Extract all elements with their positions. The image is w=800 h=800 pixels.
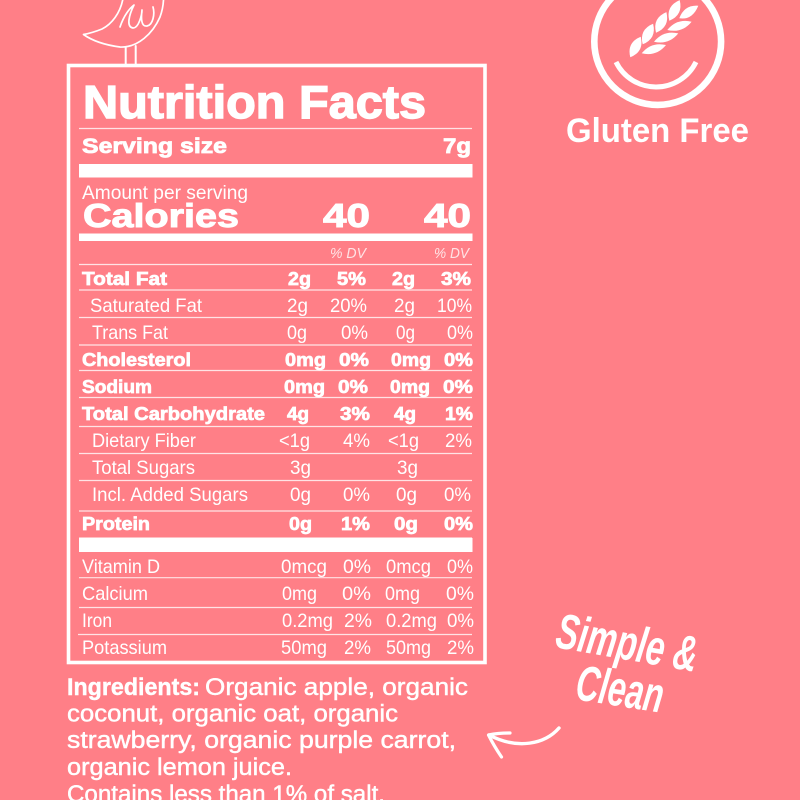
row: vitamin D [82, 556, 473, 578]
wheat ear [630, 0, 698, 57]
row: potassium [82, 637, 474, 659]
row: protein: 0% [444, 514, 473, 534]
row: total carbohydrate: 1% [445, 404, 473, 424]
row: cholesterol: Cholesterol [82, 350, 191, 370]
row: protein [82, 514, 473, 534]
row: cholesterol [82, 350, 473, 370]
serving size row [82, 135, 471, 158]
row: cholesterol: 0mg [391, 350, 431, 370]
divider lines [78, 128, 472, 634]
label border [68, 66, 485, 662]
row: cholesterol: 0mg [285, 350, 326, 370]
row: total carbohydrate: Total Carbohydrate [82, 404, 265, 424]
row: saturated fat: 20% [330, 295, 367, 317]
row: total fat [82, 269, 471, 289]
row: total sugars [92, 457, 418, 479]
row: added sugars: Incl. Added Sugars [92, 484, 248, 506]
percent daily value headers: % DV [434, 245, 471, 262]
row: saturated fat [90, 295, 472, 317]
row: potassium: 2% [447, 637, 474, 659]
row: dietary fiber: <1g [388, 430, 419, 452]
row: sodium: 0% [443, 377, 473, 397]
row: iron: 0% [447, 610, 474, 632]
row: calcium: 0% [342, 583, 371, 605]
row: potassium: 2% [344, 637, 371, 659]
icon: bird perched on label [84, 0, 164, 64]
row: cholesterol: 0% [444, 350, 473, 370]
row: iron [82, 610, 474, 632]
heading: gluten free: Gluten Free [566, 112, 749, 150]
callout: simple and clean: Simple & [552, 603, 703, 683]
row: saturated fat: 2g [394, 295, 415, 317]
row: sodium: 0% [338, 377, 368, 397]
row: dietary fiber: <1g [279, 430, 310, 452]
row: added sugars: 0% [343, 484, 370, 506]
row: sodium: Sodium [82, 377, 152, 397]
text block: ingredients: Organic apple, organic [205, 674, 468, 701]
text block: ingredients: Ingredients: [67, 674, 200, 701]
row: total sugars: 3g [397, 457, 418, 479]
thick bars [79, 164, 472, 552]
row: dietary fiber [92, 430, 472, 452]
row: added sugars: 0g [290, 484, 311, 506]
row: trans fat: 0% [341, 322, 368, 344]
calories row [83, 197, 471, 234]
row: iron: 0.2mg [386, 610, 437, 632]
row: dietary fiber: 2% [445, 430, 472, 452]
row: vitamin D: Vitamin D [82, 556, 160, 578]
row: protein: 0g [289, 514, 312, 534]
row: cholesterol: 0% [339, 350, 369, 370]
row: saturated fat: 10% [437, 295, 472, 317]
row: total fat: 5% [337, 269, 366, 289]
row: total fat: 3% [441, 269, 471, 289]
row: trans fat: Trans Fat [92, 322, 169, 344]
text block: ingredients: organic lemon juice. [67, 754, 292, 781]
row: iron: 2% [344, 610, 372, 632]
row: protein: Protein [82, 514, 150, 534]
row: dietary fiber: Dietary Fiber [92, 430, 196, 452]
panel: nutrition facts label [68, 66, 485, 662]
row: calcium: Calcium [82, 583, 148, 605]
calories row: Calories [83, 197, 239, 234]
row: vitamin D: 0% [343, 556, 371, 578]
row: trans fat: 0% [447, 322, 473, 344]
text block: ingredients: coconut, organic oat, organic [67, 700, 398, 728]
row: sodium: 0mg [284, 377, 325, 397]
row: total fat: 2g [392, 269, 415, 289]
callout: simple and clean: Clean [572, 655, 668, 724]
row: vitamin D: 0% [447, 556, 473, 578]
row: protein: 0g [394, 514, 418, 534]
row: iron: 0.2mg [282, 610, 333, 632]
row: added sugars [92, 484, 471, 506]
row: sodium [82, 377, 473, 397]
arrow: pointing to ingredients [488, 728, 559, 757]
smile [616, 62, 696, 87]
row: added sugars: 0% [444, 484, 471, 506]
row: total fat: 2g [288, 269, 311, 289]
row: potassium: 50mg [281, 637, 327, 659]
calories row: 40 [424, 197, 471, 234]
row: saturated fat: Saturated Fat [90, 295, 203, 317]
row: vitamin D: 0mcg [281, 556, 327, 578]
row: total carbohydrate [82, 404, 473, 424]
row: total carbohydrate: 3% [340, 404, 370, 424]
row: total carbohydrate: 4g [394, 404, 416, 424]
amount per serving: Amount per serving [82, 183, 248, 204]
row: saturated fat: 2g [287, 295, 308, 317]
calories row: 40 [323, 197, 370, 234]
row: total carbohydrate: 4g [287, 404, 309, 424]
serving size row: Serving size [82, 135, 227, 158]
icon ring [594, 0, 721, 105]
row: potassium: Potassium [82, 637, 167, 659]
row: protein: 1% [341, 514, 370, 534]
row: calcium: 0% [446, 583, 474, 605]
text block: ingredients: strawberry, organic purple carrot, [67, 727, 456, 754]
percent daily value headers [330, 245, 471, 262]
row: trans fat [92, 322, 473, 344]
row: trans fat: 0g [287, 322, 307, 344]
title: Nutrition Facts: Nutrition Facts [83, 76, 426, 128]
text block: ingredients [67, 674, 468, 800]
row: total fat: Total Fat [82, 269, 167, 289]
row: total sugars: Total Sugars [92, 457, 195, 479]
serving size row: 7g [443, 135, 471, 158]
row: trans fat: 0g [396, 322, 415, 344]
row: calcium: 0mg [385, 583, 420, 605]
row: potassium: 50mg [386, 637, 431, 659]
row: calcium [82, 583, 474, 605]
row: total sugars: 3g [290, 457, 311, 479]
row: vitamin D: 0mcg [386, 556, 431, 578]
row: added sugars: 0g [396, 484, 417, 506]
callout: simple and clean [552, 603, 703, 724]
row: dietary fiber: 4% [343, 430, 370, 452]
percent daily value headers: % DV [330, 245, 368, 262]
row: iron: Iron [82, 610, 112, 632]
row: sodium: 0mg [390, 377, 430, 397]
row: calcium: 0mg [282, 583, 317, 605]
icon: gluten free wheat smile [594, 0, 721, 105]
